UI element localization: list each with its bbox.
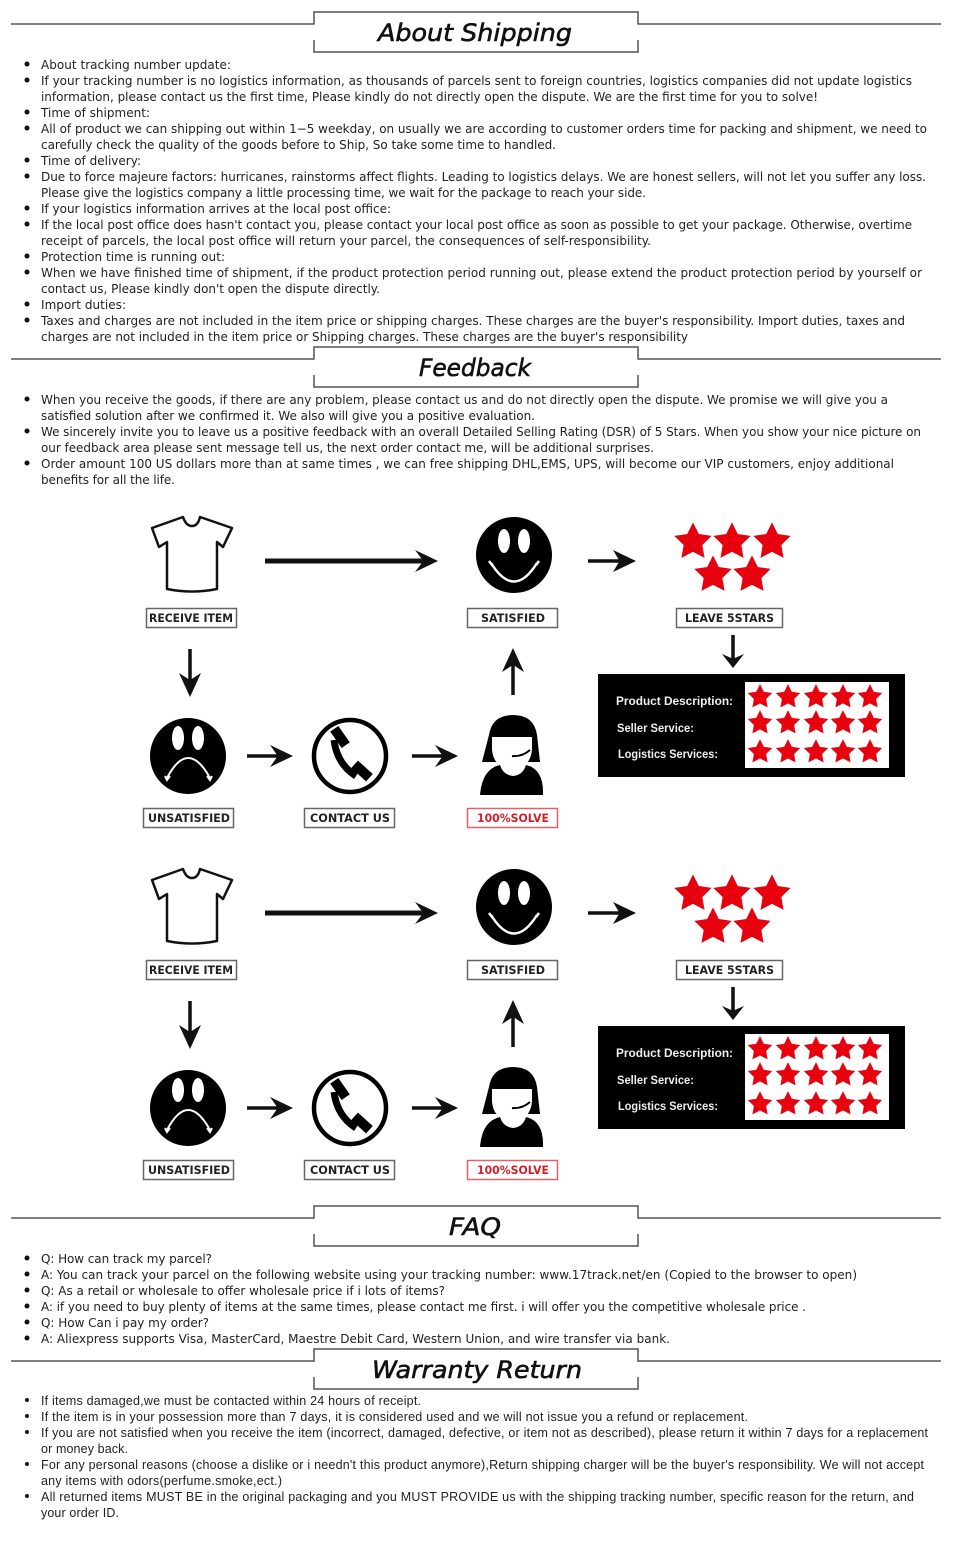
text block: shipping bullets: Import duties: xyxy=(41,298,126,312)
icon: t-shirt xyxy=(152,869,232,944)
label: contact us xyxy=(304,1160,394,1180)
heading: warranty return xyxy=(11,1349,941,1389)
text block: warranty bullets: All returned items MUST BE in the original packaging and you MUST PROVIDE us with the shipping tracking number, specific reason for the return, and xyxy=(41,1490,914,1504)
heading: faq: FAQ xyxy=(449,1213,501,1241)
text block: warranty bullets: any items with odors(perfume.smoke,ect.) xyxy=(41,1474,282,1488)
label: unsatisfied: UNSATISFIED xyxy=(148,811,230,825)
icon: t-shirt xyxy=(152,517,232,592)
text block: faq bullets: Q: How Can i pay my order? xyxy=(41,1316,209,1330)
arrow: unsatisfied to contact xyxy=(247,745,293,767)
text block: feedback bullets: Order amount 100 US dollars more than at same times , we can free shipping DHL,EMS, UPS, will become our VIP customers, enjoy additional xyxy=(41,457,894,471)
label: 100% solve xyxy=(468,808,558,828)
label: receive item: RECEIVE ITEM xyxy=(149,611,233,625)
arrow: contact to solve xyxy=(412,1097,458,1119)
arrow: unsatisfied to contact xyxy=(247,1097,293,1119)
label: satisfied: SATISFIED xyxy=(481,963,545,977)
text block: shipping bullets: information, please contact us the first time, Please kindly do not directly open the dispute. We are the first time for you to solve! xyxy=(41,90,818,104)
text block: shipping bullets: Protection time is running out: xyxy=(41,250,225,264)
label: leave 5 stars: LEAVE 5STARS xyxy=(685,611,774,625)
label: leave 5 stars xyxy=(676,960,782,980)
panel: seller rating xyxy=(598,1026,905,1129)
text block: faq bullets: A: You can track your parcel on the following website using your tracking number: www.17track.net/en (Copied to the browser to open) xyxy=(41,1268,857,1282)
panel: seller rating xyxy=(598,674,905,777)
label: satisfied xyxy=(468,608,558,628)
arrow: satisfied to stars xyxy=(588,550,636,572)
text block: shipping bullets: When we have finished time of shipment, if the product protection period running out, please extend the product protection period by yourself or xyxy=(41,266,922,280)
text block: shipping bullets: Please give the logistics company a little processing time, we wait for the package to reach your side. xyxy=(41,186,646,200)
arrow: solve to satisfied xyxy=(502,1000,524,1047)
text block: faq bullets: A: Aliexpress supports Visa, MasterCard, Maestre Debit Card, Western Union, and wire transfer via bank. xyxy=(41,1332,670,1346)
label: receive item: RECEIVE ITEM xyxy=(149,963,233,977)
text block: warranty bullets: If the item is in your possession more than 7 days, it is considered used and we will not issue you a refund or replacement. xyxy=(41,1410,748,1424)
text block: feedback bullets: satisfied solution after we confirmed it. We also will give you a positive evaluation. xyxy=(41,409,535,423)
icon: smiley xyxy=(476,517,552,593)
text block: faq bullets: Q: As a retail or wholesale to offer wholesale price if i lots of items? xyxy=(41,1284,445,1298)
label: 100% solve xyxy=(468,1160,558,1180)
text block: warranty bullets xyxy=(25,1394,929,1520)
text block: feedback bullets: We sincerely invite you to leave us a positive feedback with an overall Detailed Selling Rating (DSR) of 5 Stars. When you show your nice picture on xyxy=(41,425,921,439)
text block: feedback bullets xyxy=(24,393,921,487)
text block: faq bullets: Q: How can track my parcel? xyxy=(41,1252,212,1266)
label: unsatisfied xyxy=(144,1160,234,1180)
text block: shipping bullets: charges are not included in the item price or Shipping charges. These charges are the buyer's responsibility xyxy=(41,330,688,344)
arrow: stars to rating panel xyxy=(722,987,744,1020)
text block: shipping bullets: If the local post office does hasn't contact you, please contact your local post office as soon as possible to get your package. Otherwise, overtime xyxy=(41,218,912,232)
arrow: contact to solve xyxy=(412,745,458,767)
label: contact us: CONTACT US xyxy=(310,811,390,825)
icon: five red stars xyxy=(675,523,790,590)
icon: sad face xyxy=(150,718,226,794)
panel: feedback xyxy=(11,347,941,487)
heading: faq xyxy=(11,1206,941,1246)
text block: faq bullets xyxy=(24,1252,857,1346)
arrow: receive to unsatisfied xyxy=(179,649,201,697)
text block: shipping bullets: Taxes and charges are not included in the item price or shipping charges. These charges are the buyer's responsibility. Import duties, taxes and xyxy=(40,314,905,328)
arrow: receive to satisfied xyxy=(265,902,438,924)
label: unsatisfied xyxy=(144,808,234,828)
heading: feedback: Feedback xyxy=(419,354,532,382)
label: unsatisfied: UNSATISFIED xyxy=(148,1163,230,1177)
heading: warranty return: Warranty Return xyxy=(372,1356,582,1384)
panel: seller rating: Logistics Services: xyxy=(618,747,718,761)
text block: shipping bullets xyxy=(24,58,927,344)
icon: sad face xyxy=(150,1070,226,1146)
panel: faq xyxy=(11,1206,941,1346)
panel: seller rating: Seller Service: xyxy=(617,1073,694,1087)
icon: smiley xyxy=(476,869,552,945)
panel: about shipping xyxy=(11,12,941,344)
label: leave 5 stars xyxy=(676,608,782,628)
text block: feedback bullets: When you receive the goods, if there are any problem, please contact us and do not directly open the dispute. We promise we will give you a xyxy=(41,393,888,407)
text block: shipping bullets: contact us, Please kindly don't open the dispute directly. xyxy=(41,282,380,296)
text block: warranty bullets: or money back. xyxy=(41,1442,128,1456)
text block: feedback bullets: our feedback area please sent message tell us, the next order contact me, will be additional surprises. xyxy=(41,441,654,455)
arrow: solve to satisfied xyxy=(502,648,524,695)
label: 100% solve: 100%SOLVE xyxy=(477,811,549,825)
heading: about shipping xyxy=(11,12,941,52)
text block: shipping bullets: All of product we can shipping out within 1−5 weekday, on usually we are according to customer orders time for packing and shipment, we need to xyxy=(41,122,927,136)
arrow: satisfied to stars xyxy=(588,902,636,924)
panel: warranty return xyxy=(11,1349,941,1520)
flow chart: feedback process 1 xyxy=(144,517,905,828)
panel: seller rating: Seller Service: xyxy=(617,721,694,735)
label: satisfied: SATISFIED xyxy=(481,611,545,625)
text block: faq bullets: A: if you need to buy plenty of items at the same times, please contact me first. i will offer you the competitive wholesale price . xyxy=(41,1300,806,1314)
text block: feedback bullets: benefits for all the life. xyxy=(41,473,175,487)
text block: shipping bullets: carefully check the quality of the goods before to Ship, So take some time to handled. xyxy=(41,138,556,152)
text block: warranty bullets: If items damaged,we must be contacted within 24 hours of receipt. xyxy=(41,1394,421,1408)
text block: shipping bullets: If your tracking number is no logistics information, as thousands of parcels sent to foreign countries, logistics companies did not update logistics xyxy=(41,74,912,88)
panel: seller rating: Product Description: xyxy=(616,1046,733,1060)
text block: shipping bullets: Time of shipment: xyxy=(40,106,150,120)
icon: support agent xyxy=(480,715,543,795)
arrow: receive to satisfied xyxy=(265,550,438,572)
label: satisfied xyxy=(468,960,558,980)
text block: warranty bullets: For any personal reasons (choose a dislike or i needn't this product anymore),Return shipping charger will be the buyer's responsibility. We will not accept xyxy=(41,1458,925,1472)
text block: shipping bullets: receipt of parcels, the local post office will return your parcel, the consequences of self-responsibility. xyxy=(41,234,651,248)
icon: phone xyxy=(314,720,386,792)
text block: shipping bullets: Due to force majeure factors: hurricanes, rainstorms affect flights. Leading to logistics delays. We are honest sellers, will not let you suffer any loss. xyxy=(41,170,926,184)
label: leave 5 stars: LEAVE 5STARS xyxy=(685,963,774,977)
panel: seller rating: Logistics Services: xyxy=(618,1099,718,1113)
icon: support agent xyxy=(480,1067,543,1147)
text block: warranty bullets: If you are not satisfied when you receive the item (incorrect, damaged, defective, or item not as described), please return it within 7 days for a replacement xyxy=(41,1426,929,1440)
label: contact us xyxy=(304,808,394,828)
flow chart: feedback process 2 xyxy=(144,869,905,1180)
text block: shipping bullets: If your logistics information arrives at the local post office: xyxy=(41,202,391,216)
arrow: receive to unsatisfied xyxy=(179,1001,201,1049)
icon: phone xyxy=(314,1072,386,1144)
text block: shipping bullets: About tracking number update: xyxy=(41,58,231,72)
heading: feedback xyxy=(11,347,941,387)
text block: shipping bullets: Time of delivery: xyxy=(40,154,141,168)
label: 100% solve: 100%SOLVE xyxy=(477,1163,549,1177)
label: contact us: CONTACT US xyxy=(310,1163,390,1177)
text block: warranty bullets: your order ID. xyxy=(41,1506,119,1520)
icon: five red stars xyxy=(675,875,790,942)
heading: about shipping: About Shipping xyxy=(376,19,572,47)
panel: seller rating: Product Description: xyxy=(616,694,733,708)
arrow: stars to rating panel xyxy=(722,635,744,668)
